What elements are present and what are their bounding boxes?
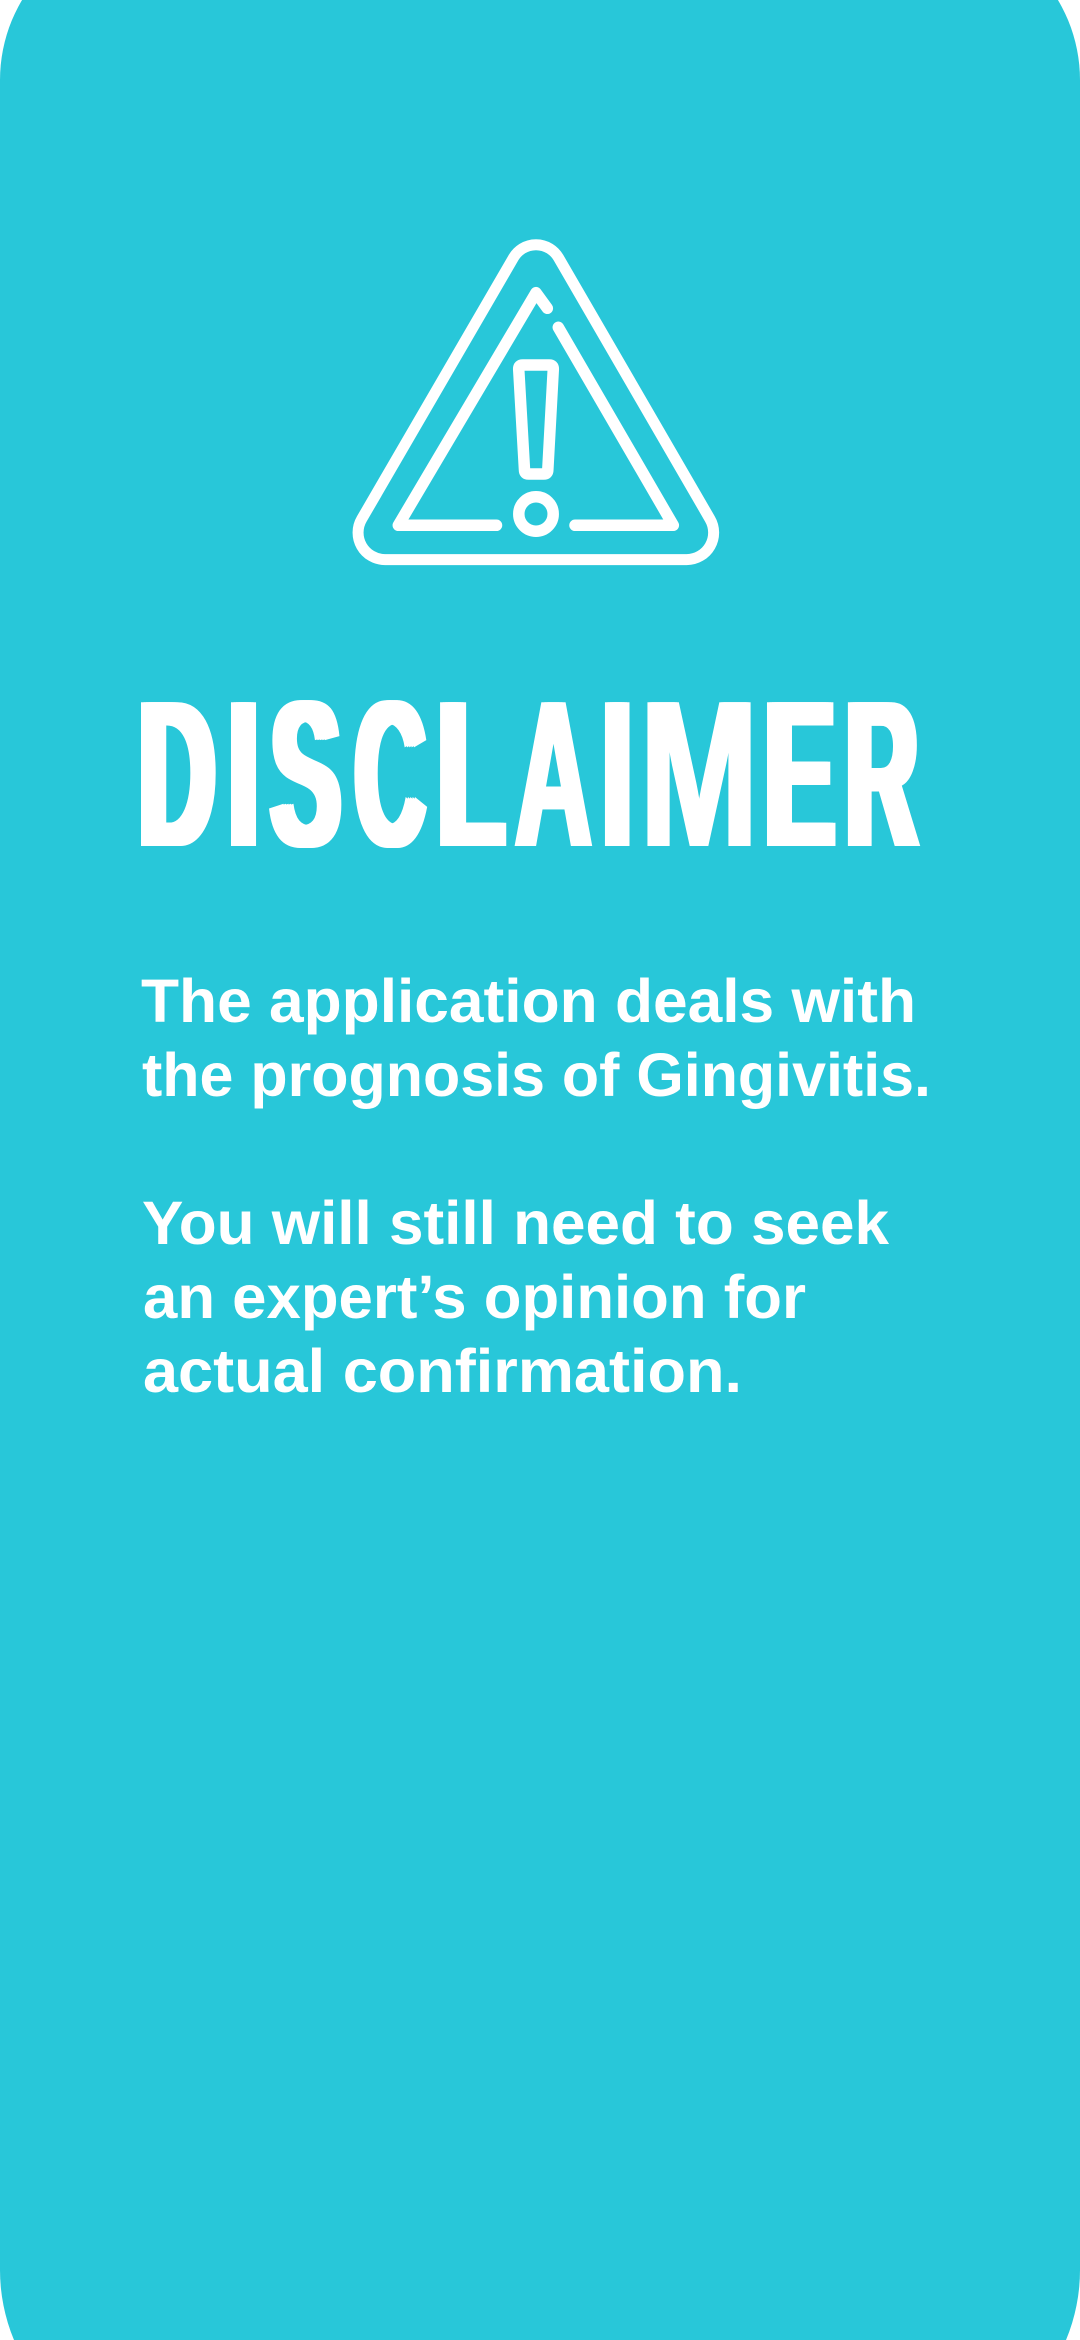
title: M (640, 658, 758, 891)
paragraph: seek expert opinion: an expert’s opinion for (143, 1263, 806, 1331)
paragraph: application scope: The application deals with (141, 967, 916, 1035)
title: C (355, 658, 425, 891)
icon: exclamation bar (519, 365, 553, 474)
icon: warning triangle (352, 239, 720, 566)
paragraph: seek expert opinion: actual confirmation. (143, 1337, 742, 1405)
icon: inner triangle right stroke (558, 327, 673, 525)
title: L (438, 658, 504, 891)
title: D (139, 658, 215, 891)
paragraph: seek expert opinion (142, 1189, 889, 1405)
title: R (846, 658, 917, 891)
title: E (765, 658, 835, 891)
paragraph: application scope: the prognosis of Gingivitis. (142, 1041, 931, 1109)
title: I (229, 658, 258, 891)
title: A (515, 658, 592, 891)
title: S (271, 658, 341, 891)
icon: exclamation dot (519, 497, 553, 531)
icon: inner triangle left stroke (398, 293, 547, 525)
paragraph: application scope (141, 967, 931, 1109)
icon: outer triangle outline (358, 245, 714, 560)
title: I (603, 658, 632, 891)
paragraph: seek expert opinion: You will still need to seek (142, 1189, 889, 1257)
title (139, 658, 920, 891)
